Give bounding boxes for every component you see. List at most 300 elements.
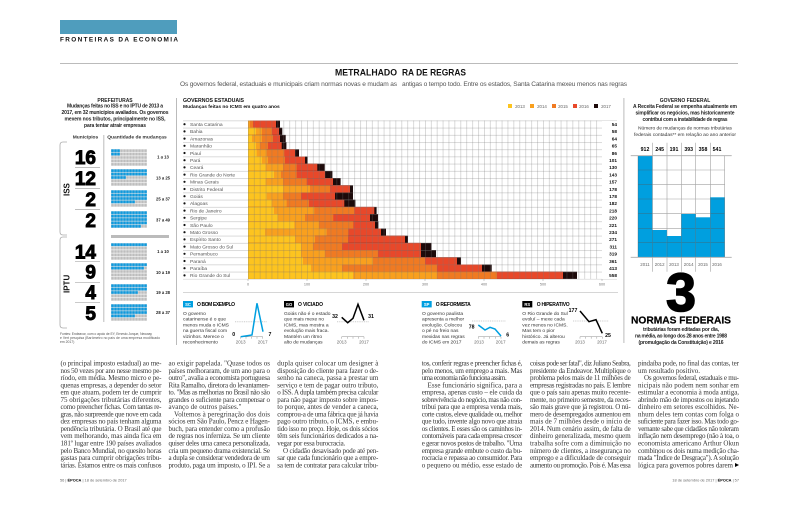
article column 3: to porque, antes de vender a caneca, bbox=[277, 403, 379, 411]
stacked bar chart bbox=[183, 120, 617, 280]
article column 1: tárias. Estamos entre os mais confusos bbox=[60, 461, 162, 469]
RS text: evoluí – mexe cada bbox=[522, 317, 565, 323]
article column 2: grandes o suficiente para compensar o bbox=[168, 396, 270, 404]
article column 5: coisas pode ser fatal", diz Juliano Seabra, bbox=[530, 360, 631, 368]
article column 4: e gerar novos postos de trabalho. "Uma bbox=[422, 440, 523, 448]
article column 6: um resultado positivo. bbox=[638, 367, 700, 375]
article column 6: inflação nem desemprego (não à toa, o bbox=[638, 432, 740, 440]
column values: 191 bbox=[670, 147, 678, 153]
article column 1: 75 obrigações tributárias diferentes, bbox=[60, 396, 162, 404]
article column 6: dinheiro em setores escolhidos. Ne- bbox=[638, 403, 740, 411]
state totals: 143 bbox=[609, 172, 617, 177]
article column 4: os clientes. E esses são os caminhos in- bbox=[422, 425, 523, 433]
SC text: reconhecimento bbox=[183, 340, 218, 346]
article column 4: uma economia não funciona assim. bbox=[422, 374, 507, 382]
SP heading: SP bbox=[424, 302, 430, 307]
title bbox=[335, 66, 466, 78]
prefeituras intro text: mexem nos tributos, principalmente no ISS, bbox=[64, 116, 166, 122]
section header bbox=[60, 20, 178, 44]
GO line chart: 32 bbox=[332, 314, 338, 320]
column headers: Municípios bbox=[73, 135, 99, 141]
state totals: 101 bbox=[609, 158, 617, 163]
RS text: vez menos no ICMS. bbox=[522, 322, 568, 328]
article column 2: Voltemos à peregrinação dos dois bbox=[174, 410, 270, 418]
SP text: evolução. Colocou bbox=[422, 322, 463, 328]
state labels: Distrito Federal bbox=[190, 187, 223, 193]
municipality counts: 2 bbox=[85, 211, 96, 232]
column values: 245 bbox=[655, 147, 664, 153]
article column 3: sar que cada funcionário que a empre- bbox=[277, 454, 379, 462]
panel: governos estaduais bbox=[183, 98, 618, 286]
article column 2: sócios em São Paulo, Pencz e Hagen- bbox=[168, 418, 271, 426]
state totals: 413 bbox=[609, 266, 617, 271]
prefeituras intro text: Mudanças feitas no ISS e no IPTU de 2013 a bbox=[67, 104, 163, 110]
article column 1: 181º lugar entre 190 países avaliados bbox=[60, 440, 162, 448]
axis: 500 bbox=[540, 282, 546, 286]
state totals: 65 bbox=[612, 144, 617, 149]
legend: 2014 bbox=[537, 104, 547, 109]
range labels: 13 a 25 bbox=[156, 176, 171, 180]
article column 3: comprou-a de uma fábrica que já havia bbox=[277, 410, 379, 418]
federal intro: federais contadas** em relação ao ano anterior bbox=[634, 132, 736, 138]
RS text: Mas tem o pior bbox=[522, 328, 555, 334]
heading bbox=[183, 98, 280, 110]
year labels: 2016 bbox=[712, 262, 722, 267]
article column 4: empresa, apenas custo – ele cuida da bbox=[422, 389, 523, 397]
RS text: histórico. Já alterou bbox=[522, 334, 565, 340]
state labels: Goiás bbox=[190, 194, 203, 200]
column values: 541 bbox=[713, 147, 721, 153]
year labels: 2013 bbox=[669, 262, 679, 267]
federal intro bbox=[633, 104, 738, 138]
range labels: 19 a 28 bbox=[156, 290, 171, 295]
state totals: 54 bbox=[612, 122, 617, 127]
panel: GO o viciado bbox=[284, 301, 374, 346]
year labels bbox=[640, 262, 722, 267]
state totals: 361 bbox=[609, 259, 617, 264]
SP text: do ICMS em 2017 bbox=[422, 340, 462, 346]
GO line chart: 2017 bbox=[359, 340, 369, 345]
state totals: 319 bbox=[609, 252, 617, 257]
RS heading bbox=[522, 301, 570, 308]
article column 3: vegar por essa burocracia. bbox=[277, 440, 346, 448]
federal intro: simplificar os negócios, mas historicamente bbox=[636, 111, 735, 117]
article column 3: o ISS. A dupla também precisa calcular bbox=[277, 389, 379, 397]
big number: 3 bbox=[666, 263, 696, 323]
article column 1: pelo Banco Mundial, no quesito horas bbox=[60, 447, 162, 455]
year labels: 2011 bbox=[640, 262, 650, 267]
SP text: mexidas nas regras bbox=[422, 334, 465, 340]
state labels: Sergipe bbox=[190, 216, 207, 222]
article column 4 bbox=[422, 360, 523, 469]
article column 5 bbox=[530, 360, 632, 469]
range labels: 1 a 13 bbox=[157, 154, 169, 160]
article column 2: de regras nos inferniza. Se um cliente bbox=[168, 432, 270, 440]
article column 5: número de clientes, a insegurança no bbox=[530, 447, 631, 455]
SC heading: O BOM EXEMPLO bbox=[197, 302, 235, 308]
subtitle: Os governos federal, estaduais e municipais criam normas novas e mudam as bbox=[180, 81, 398, 88]
state labels: Alagoas bbox=[190, 201, 208, 207]
state labels: Maranhão bbox=[190, 144, 212, 150]
article column 6: suficiente para fazer isso. Mas todo go- bbox=[638, 418, 740, 426]
range labels: 10 a 19 bbox=[156, 270, 171, 275]
article column 3: O cidadão desavisado pode até pen- bbox=[283, 447, 379, 455]
panel: SP o reformista bbox=[422, 301, 509, 346]
legend: 2013 bbox=[515, 104, 525, 109]
SP line chart bbox=[469, 321, 509, 345]
federal norms heading: NORMAS FEDERAIS bbox=[631, 314, 731, 326]
section header: FRONTEIRAS DA ECONOMIA bbox=[60, 36, 178, 44]
footer left: 56 | ÉPOCA | 18 de setembro de 2017 bbox=[60, 478, 127, 482]
state labels: Espírito Santo bbox=[190, 237, 221, 243]
legend: 2015 bbox=[558, 104, 568, 109]
state labels: Pará bbox=[190, 158, 201, 164]
state totals: 58 bbox=[612, 129, 617, 134]
RS line chart: 2017 bbox=[597, 340, 607, 345]
article column 6: combinou os dois numa medição cha- bbox=[638, 447, 740, 455]
column headers: Quantidade de mudanças bbox=[107, 135, 167, 141]
RS heading: O HIPERATIVO bbox=[537, 302, 570, 308]
article column 5: aumento ou promoção. Pois é. Mas essa bbox=[530, 461, 632, 469]
GO text: Goiás não é o estado bbox=[284, 311, 331, 317]
article column 3: para não pagar imposto sobre impos- bbox=[277, 396, 379, 404]
SP line chart: 2017 bbox=[496, 340, 506, 345]
RS line chart: 25 bbox=[605, 333, 611, 339]
state totals bbox=[602, 121, 618, 279]
article column 5: mais de 7 milhões desde o início de bbox=[530, 418, 631, 426]
RS text: demais as regras bbox=[522, 340, 560, 346]
SP line chart: 78 bbox=[469, 325, 475, 331]
state labels: São Paulo bbox=[190, 223, 213, 229]
state totals: 86 bbox=[612, 151, 617, 156]
RS text bbox=[522, 311, 568, 346]
column values: 393 bbox=[684, 147, 693, 153]
article column 2: quiser deles uma caneca personalizada, bbox=[168, 440, 270, 448]
article column 5: que o país saiu apenas muito recente- bbox=[530, 389, 631, 397]
article column 5: são mais grave que já registrou. O nú- bbox=[530, 403, 631, 411]
article column 1: pendência tributária. O Brasil até que bbox=[60, 425, 162, 433]
RS text: O Rio Grande do Sul bbox=[522, 311, 568, 317]
legend: 2017 bbox=[601, 104, 611, 109]
GO heading: O VICIADO bbox=[298, 302, 323, 308]
prefeituras intro text: para tentar atrair empresas bbox=[84, 123, 146, 129]
heading: Mudanças feitas no ICMS em quatro anos bbox=[183, 104, 280, 110]
SP text: o pé no freio nas bbox=[422, 328, 459, 334]
article column 1: nos 50 vezes por ano nesse mesmo pe- bbox=[60, 367, 162, 375]
footnote: e Vert pesquisa (Barômetro no país de uma empresa modificado bbox=[60, 336, 160, 340]
state labels: Rio de Janeiro bbox=[190, 208, 222, 214]
RS line chart bbox=[569, 308, 611, 345]
state totals: 130 bbox=[609, 165, 617, 170]
SC text: O governo bbox=[183, 311, 206, 317]
SC heading bbox=[183, 301, 235, 308]
SC text: catarinense é o que bbox=[183, 317, 226, 323]
state totals: 221 bbox=[609, 223, 617, 228]
federal intro: contribui com a instabilidade de regras bbox=[642, 117, 728, 123]
article column 1: ríodo, em média. Mesmo micro e pe- bbox=[60, 374, 162, 382]
footnote: em 2017) bbox=[60, 340, 74, 344]
title: METRALHADO bbox=[335, 66, 397, 78]
SP heading bbox=[422, 301, 471, 308]
SC line chart: 2017 bbox=[258, 340, 268, 345]
SP text: O governo paulista bbox=[422, 311, 463, 317]
SP heading: O REFORMISTA bbox=[436, 302, 471, 308]
state labels: Minas Gerais bbox=[190, 180, 219, 186]
article column 6: Os governos federal, estaduais e mu- bbox=[644, 374, 740, 382]
article column 5: mente, no primeiro semestre, da reces- bbox=[530, 396, 631, 404]
SC line chart bbox=[232, 303, 272, 345]
GO line chart: 2013 bbox=[337, 340, 347, 345]
year labels: 2012 bbox=[655, 262, 665, 267]
range labels: 28 a 37 bbox=[156, 310, 171, 315]
article column 1: (o principal imposto estadual) ao me- bbox=[60, 360, 162, 368]
article column 4: o pequeno ou médio, esse estado de bbox=[422, 461, 522, 469]
panel: RS o hiperativo bbox=[522, 301, 611, 346]
state totals: 234 bbox=[609, 230, 617, 235]
state labels: Mato Grosso bbox=[190, 230, 218, 236]
axis: 600 bbox=[599, 282, 605, 286]
GO text: evolução mais fraca. bbox=[284, 328, 329, 334]
SC text: na guerra fiscal com bbox=[183, 328, 227, 334]
federal heading: GOVERNO FEDERAL bbox=[660, 98, 710, 104]
municipality counts: 12 bbox=[75, 169, 96, 190]
state totals: 157 bbox=[609, 180, 617, 185]
SC heading: SC bbox=[185, 302, 191, 307]
article column 4: pelo menos, um emprego a mais. Mas bbox=[422, 367, 522, 375]
prefeituras heading: PREFEITURAS bbox=[97, 98, 133, 104]
article column 2: a dupla se considerar vendedora de um bbox=[168, 454, 271, 462]
article column 4: sobrevivência do negócio, mas não con- bbox=[422, 396, 523, 404]
IPTU bracket: IPTU bbox=[62, 275, 72, 293]
legend bbox=[508, 104, 611, 109]
state totals: 178 bbox=[609, 194, 617, 199]
axis: 200 bbox=[363, 282, 369, 286]
article column 3: têm seis funcionários dedicados a na- bbox=[277, 432, 379, 440]
state labels: Piauí bbox=[190, 151, 202, 157]
axis: 0 bbox=[247, 282, 249, 286]
article column 6: pindaíba pode, no final das contas, ter bbox=[638, 360, 740, 368]
state totals: 220 bbox=[609, 216, 617, 221]
article column 5: presidente da Endeavor. Multiplique o bbox=[530, 367, 631, 375]
column values: 912 bbox=[641, 147, 649, 153]
range labels: 37 a 49 bbox=[156, 218, 171, 222]
panel: SC o bom exemplo bbox=[183, 301, 272, 346]
article column 1: quenas empresas, a depender do setor bbox=[60, 381, 162, 389]
column values bbox=[641, 147, 721, 153]
prefeituras intro text: 2017, em 32 municípios avaliados. Os governos bbox=[62, 110, 169, 116]
SP line chart: 2013 bbox=[474, 340, 484, 345]
ISS bracket: ISS bbox=[62, 182, 72, 196]
article column 6: lógica para governos pobres darem bbox=[638, 461, 734, 469]
axis bbox=[247, 279, 605, 286]
state labels: Amazonas bbox=[190, 136, 214, 142]
article column 2: outro", avalia a economista portuguesa bbox=[168, 374, 271, 382]
article column 4: corte custos, eleve qualidade ou, melhor bbox=[422, 410, 523, 418]
article column 5: 2014. Num cenário assim, de falta de bbox=[530, 425, 631, 433]
subtitle bbox=[180, 81, 628, 88]
article column 5: problema pelos mais de 11 milhões de bbox=[530, 374, 631, 382]
article column 5: mero de desempregados aumentou em bbox=[530, 410, 631, 418]
article column 4: tos, conferir regras e preencher fichas é, bbox=[422, 360, 522, 368]
article column 2: ao exigir papelada. "Quase todos os bbox=[168, 360, 270, 368]
SC line chart: 0 bbox=[232, 332, 235, 338]
state labels: Mato Grosso do Sul bbox=[190, 244, 233, 250]
state labels: Ceará bbox=[190, 165, 204, 171]
article column 5: empresas registradas no país. E lembre bbox=[530, 381, 631, 389]
state totals: 271 bbox=[609, 237, 617, 242]
state labels: Bahia bbox=[190, 129, 203, 135]
article column 2: países melhoraram, de um ano para o bbox=[168, 367, 270, 375]
SP text: apresenta a melhor bbox=[422, 317, 465, 323]
article column 1: dez empresas no país tenham alguma bbox=[60, 418, 162, 426]
article column 4: que tudo, invente algo novo que atraia bbox=[422, 418, 523, 426]
article column 6: nhum deles tem contas com folga o bbox=[638, 410, 740, 418]
article column 6 bbox=[638, 360, 740, 469]
subtitle: antigas o tempo todo. Entre os estados, Santa Catarina mexeu menos nas regras bbox=[402, 81, 628, 88]
year labels: 2015 bbox=[698, 262, 708, 267]
SP line chart: 6 bbox=[506, 333, 509, 339]
SP text bbox=[422, 311, 465, 346]
ISS bracket bbox=[60, 142, 72, 235]
federal norms text: tributárias foram editadas por dia, bbox=[643, 327, 720, 333]
range labels: 1 a 10 bbox=[157, 249, 169, 254]
municipality counts bbox=[75, 148, 100, 325]
state totals: 311 bbox=[609, 244, 617, 249]
GO heading: GO bbox=[286, 302, 293, 307]
article column 6: estimular a economia à moda antiga, bbox=[638, 389, 739, 397]
municipality counts: 2 bbox=[85, 190, 96, 211]
article column 2: cria um pequeno drama existencial. Se bbox=[168, 447, 270, 455]
article column 3: sa tem de contratar para calcular tribu- bbox=[277, 461, 379, 469]
SC line chart: 2013 bbox=[236, 340, 246, 345]
axis: 100 bbox=[304, 282, 310, 286]
state labels: Rio Grande do Norte bbox=[190, 172, 235, 178]
legend: 2016 bbox=[579, 104, 589, 109]
article column 1: gras, não surpreende que nove em cada bbox=[60, 410, 162, 418]
year labels: 2014 bbox=[684, 262, 694, 267]
state labels: Rio Grande do Sul bbox=[190, 273, 230, 279]
article column 5: emprego e a dificuldade de conseguir bbox=[530, 454, 631, 462]
state totals: 178 bbox=[609, 187, 617, 192]
article column 6: nicipais não podem nem sonhar em bbox=[638, 381, 740, 389]
article column 2: avanço de outros países." bbox=[168, 403, 242, 411]
axis: 400 bbox=[481, 282, 487, 286]
article column 4: empresa grande embute o custo da bu- bbox=[422, 447, 523, 455]
state totals: 218 bbox=[609, 208, 617, 213]
article column 6: vernante sabe que cidadãos não toleram bbox=[638, 425, 740, 433]
article column 2: to. "Mas as melhorias no Brasil não são bbox=[168, 389, 270, 397]
GO heading bbox=[284, 301, 323, 308]
SC text: vizinhos. Merece o bbox=[183, 334, 224, 340]
footnote bbox=[60, 332, 160, 344]
prefeituras intro text bbox=[62, 104, 169, 129]
heading: GOVERNOS ESTADUAIS bbox=[183, 98, 245, 104]
footnote: Fontes: Endeavor, com o apoio de EY, Ernesto Jorque, Neoway bbox=[60, 332, 152, 336]
article column 1: gastas para cumprir obrigações tribu- bbox=[60, 454, 162, 462]
RS line chart: 177 bbox=[569, 308, 577, 314]
article column 3: senho na caneca, passa a prestar um bbox=[277, 374, 379, 382]
GO text: que mais mexe no bbox=[284, 317, 324, 323]
article column 3: serviço e tem de pagar outro tributo, bbox=[277, 381, 379, 389]
state totals: 182 bbox=[609, 201, 617, 206]
axis: 300 bbox=[422, 282, 428, 286]
SC text: menos muda o ICMS bbox=[183, 322, 230, 328]
article column 2 bbox=[168, 360, 271, 469]
municipality counts: 16 bbox=[75, 148, 96, 169]
GO text: ICMS, mas mostra a bbox=[284, 322, 329, 328]
article column 6: abrindo mão de impostos ou injetando bbox=[638, 396, 740, 404]
federal norms text: (promulgação da Constituição) e 2016 bbox=[638, 340, 724, 346]
column values: 358 bbox=[699, 147, 707, 153]
GO text bbox=[284, 311, 331, 346]
article column 4: tribui para que a empresa venda mais, bbox=[422, 403, 522, 411]
state labels: Santa Catarina bbox=[190, 122, 223, 128]
RS line chart: 2013 bbox=[575, 340, 585, 345]
IPTU bracket bbox=[60, 237, 72, 328]
article column 3: disposição do cliente para fazer o de- bbox=[277, 367, 379, 375]
state labels bbox=[190, 122, 235, 279]
article column 1: como preencher fichas. Com tantas re- bbox=[60, 403, 162, 411]
federal intro: Número de mudanças de normas tributárias bbox=[638, 126, 733, 132]
GO line chart bbox=[332, 304, 374, 345]
RS heading: RS bbox=[524, 302, 530, 307]
panel: governo federal bbox=[631, 98, 738, 346]
article column 1 bbox=[60, 360, 162, 469]
range labels: 25 a 37 bbox=[156, 196, 171, 202]
state labels: Paraíba bbox=[190, 266, 207, 272]
article column 1: vem melhorando, mas ainda fica em bbox=[60, 432, 162, 440]
article column 4: Esse funcionário significa, para a bbox=[428, 381, 523, 389]
state totals: 558 bbox=[609, 273, 617, 278]
state totals: 64 bbox=[612, 136, 617, 141]
article column 1: em que atuam, podem ter de cumprir bbox=[60, 389, 162, 397]
column headers bbox=[73, 135, 167, 141]
title: RA DE REGRAS bbox=[402, 66, 466, 78]
bar chart bbox=[631, 143, 732, 272]
article column 3: tido isso no preço. Hoje, os dois sócios bbox=[277, 425, 379, 433]
article column 5: dinheiro generalizada, mesmo quem bbox=[530, 432, 631, 440]
GO text: Mantém um ritmo bbox=[284, 334, 322, 340]
article column 3: pago outro tributo, o ICMS, e embu- bbox=[277, 418, 379, 426]
municipality counts: 14 bbox=[75, 242, 96, 264]
SC text bbox=[183, 311, 230, 346]
article column 5: trabalha sofre com a diminuição no bbox=[530, 440, 631, 448]
article column 6: mada "Índice de Desgraça"). A solução bbox=[638, 454, 740, 462]
article column 2: Rita Ramalho, diretora do levantamen- bbox=[168, 381, 271, 389]
GO text: alto de mudanças bbox=[284, 340, 323, 346]
federal norms text bbox=[635, 327, 727, 346]
waffle charts bbox=[111, 149, 169, 321]
federal norms text: na média, ao longo dos 28 anos entre 1988 bbox=[635, 334, 727, 340]
GO line chart: 31 bbox=[368, 314, 374, 320]
federal intro: A Receita Federal se empenha atualmente em bbox=[633, 104, 738, 110]
SC line chart: 7 bbox=[269, 332, 272, 338]
state labels: Pernambuco bbox=[190, 252, 218, 258]
footer right: 18 de setembro de 2017 | ÉPOCA | 57 bbox=[672, 478, 739, 482]
article column 6: economista americano Arthur Okun bbox=[638, 440, 740, 448]
article column 2: buch, para entender como a profusão bbox=[168, 425, 270, 433]
range labels bbox=[156, 154, 171, 315]
municipality counts: 9 bbox=[85, 262, 96, 284]
state bullets bbox=[183, 123, 186, 276]
state labels: Paraná bbox=[190, 259, 206, 265]
article column 4: rocracia e repassa ao consumidor. Para bbox=[422, 454, 523, 462]
municipality counts: 4 bbox=[85, 283, 96, 304]
article column 2: produto, paga um imposto, o IPI. Se a bbox=[168, 461, 271, 469]
municipality counts: 5 bbox=[85, 304, 96, 325]
article column 4: contornáveis para cada empresa crescer bbox=[422, 432, 523, 440]
article column 3 bbox=[277, 360, 379, 469]
